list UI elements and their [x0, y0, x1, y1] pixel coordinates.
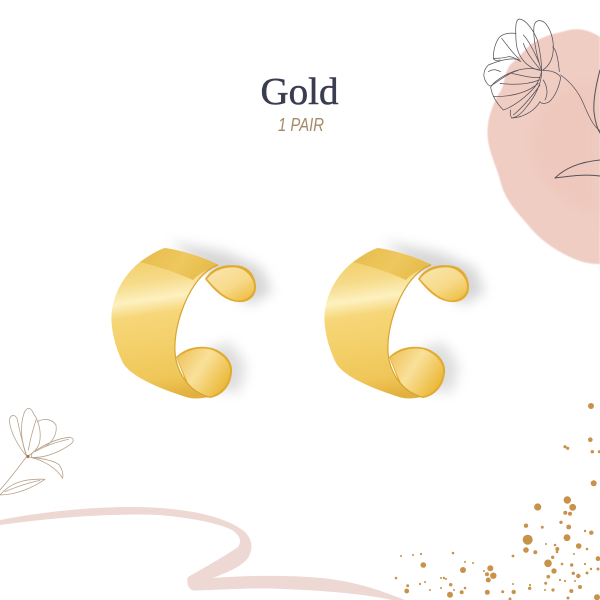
icon: line-art flower top right: [484, 19, 600, 131]
subtitle: 1 PAIR: [278, 115, 324, 135]
flower center dot: [26, 455, 30, 458]
icon: flower stem and leaf right edge: [555, 70, 600, 178]
watercolor blob: [487, 29, 600, 264]
brush stroke ribbon: [0, 507, 405, 600]
gold ear cuff right: [324, 242, 485, 398]
title: Gold: [260, 71, 338, 113]
gold ear cuff left: [111, 242, 272, 398]
gold splatter: [395, 403, 600, 600]
icon: line-art flower bottom left: [0, 408, 73, 495]
